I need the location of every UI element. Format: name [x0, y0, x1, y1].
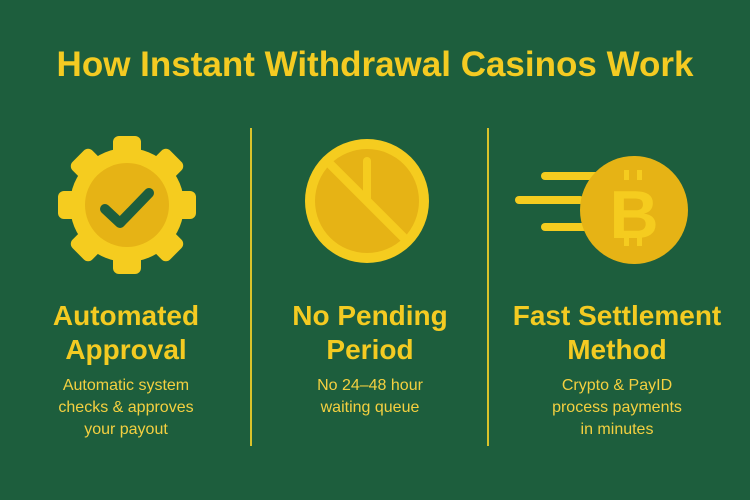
panel: fast settlement [513, 300, 721, 438]
panel: no pending period: waiting queue [321, 399, 419, 416]
panel: no pending period [292, 300, 448, 416]
panel: automated approval: your payout [84, 421, 168, 438]
panel: no pending period: No Pending [292, 300, 448, 331]
panel: no pending period: Period [326, 334, 414, 365]
panel: no pending period: No 24–48 hour [317, 377, 423, 394]
panel: fast settlement: Fast Settlement [513, 300, 721, 331]
panel: automated approval: checks & approves [58, 399, 194, 416]
panel: automated approval: Approval [65, 334, 187, 365]
panel: automated approval [53, 300, 199, 438]
panel: fast settlement: Method [567, 334, 667, 365]
panel: automated approval: Automatic system [63, 377, 189, 394]
panel: automated approval: Automated [53, 300, 199, 331]
panel: fast settlement: process payments [552, 399, 682, 416]
icon: bitcoin coin with speed lines [519, 156, 688, 264]
icon: no clock [305, 139, 429, 263]
panel: fast settlement: in minutes [581, 421, 653, 438]
panel: fast settlement: Crypto & PayID [562, 377, 672, 394]
icon: bitcoin coin with speed lines: B [609, 177, 659, 253]
icon: gear with check [58, 136, 196, 274]
title: How Instant Withdrawal Casinos Work [57, 45, 693, 84]
